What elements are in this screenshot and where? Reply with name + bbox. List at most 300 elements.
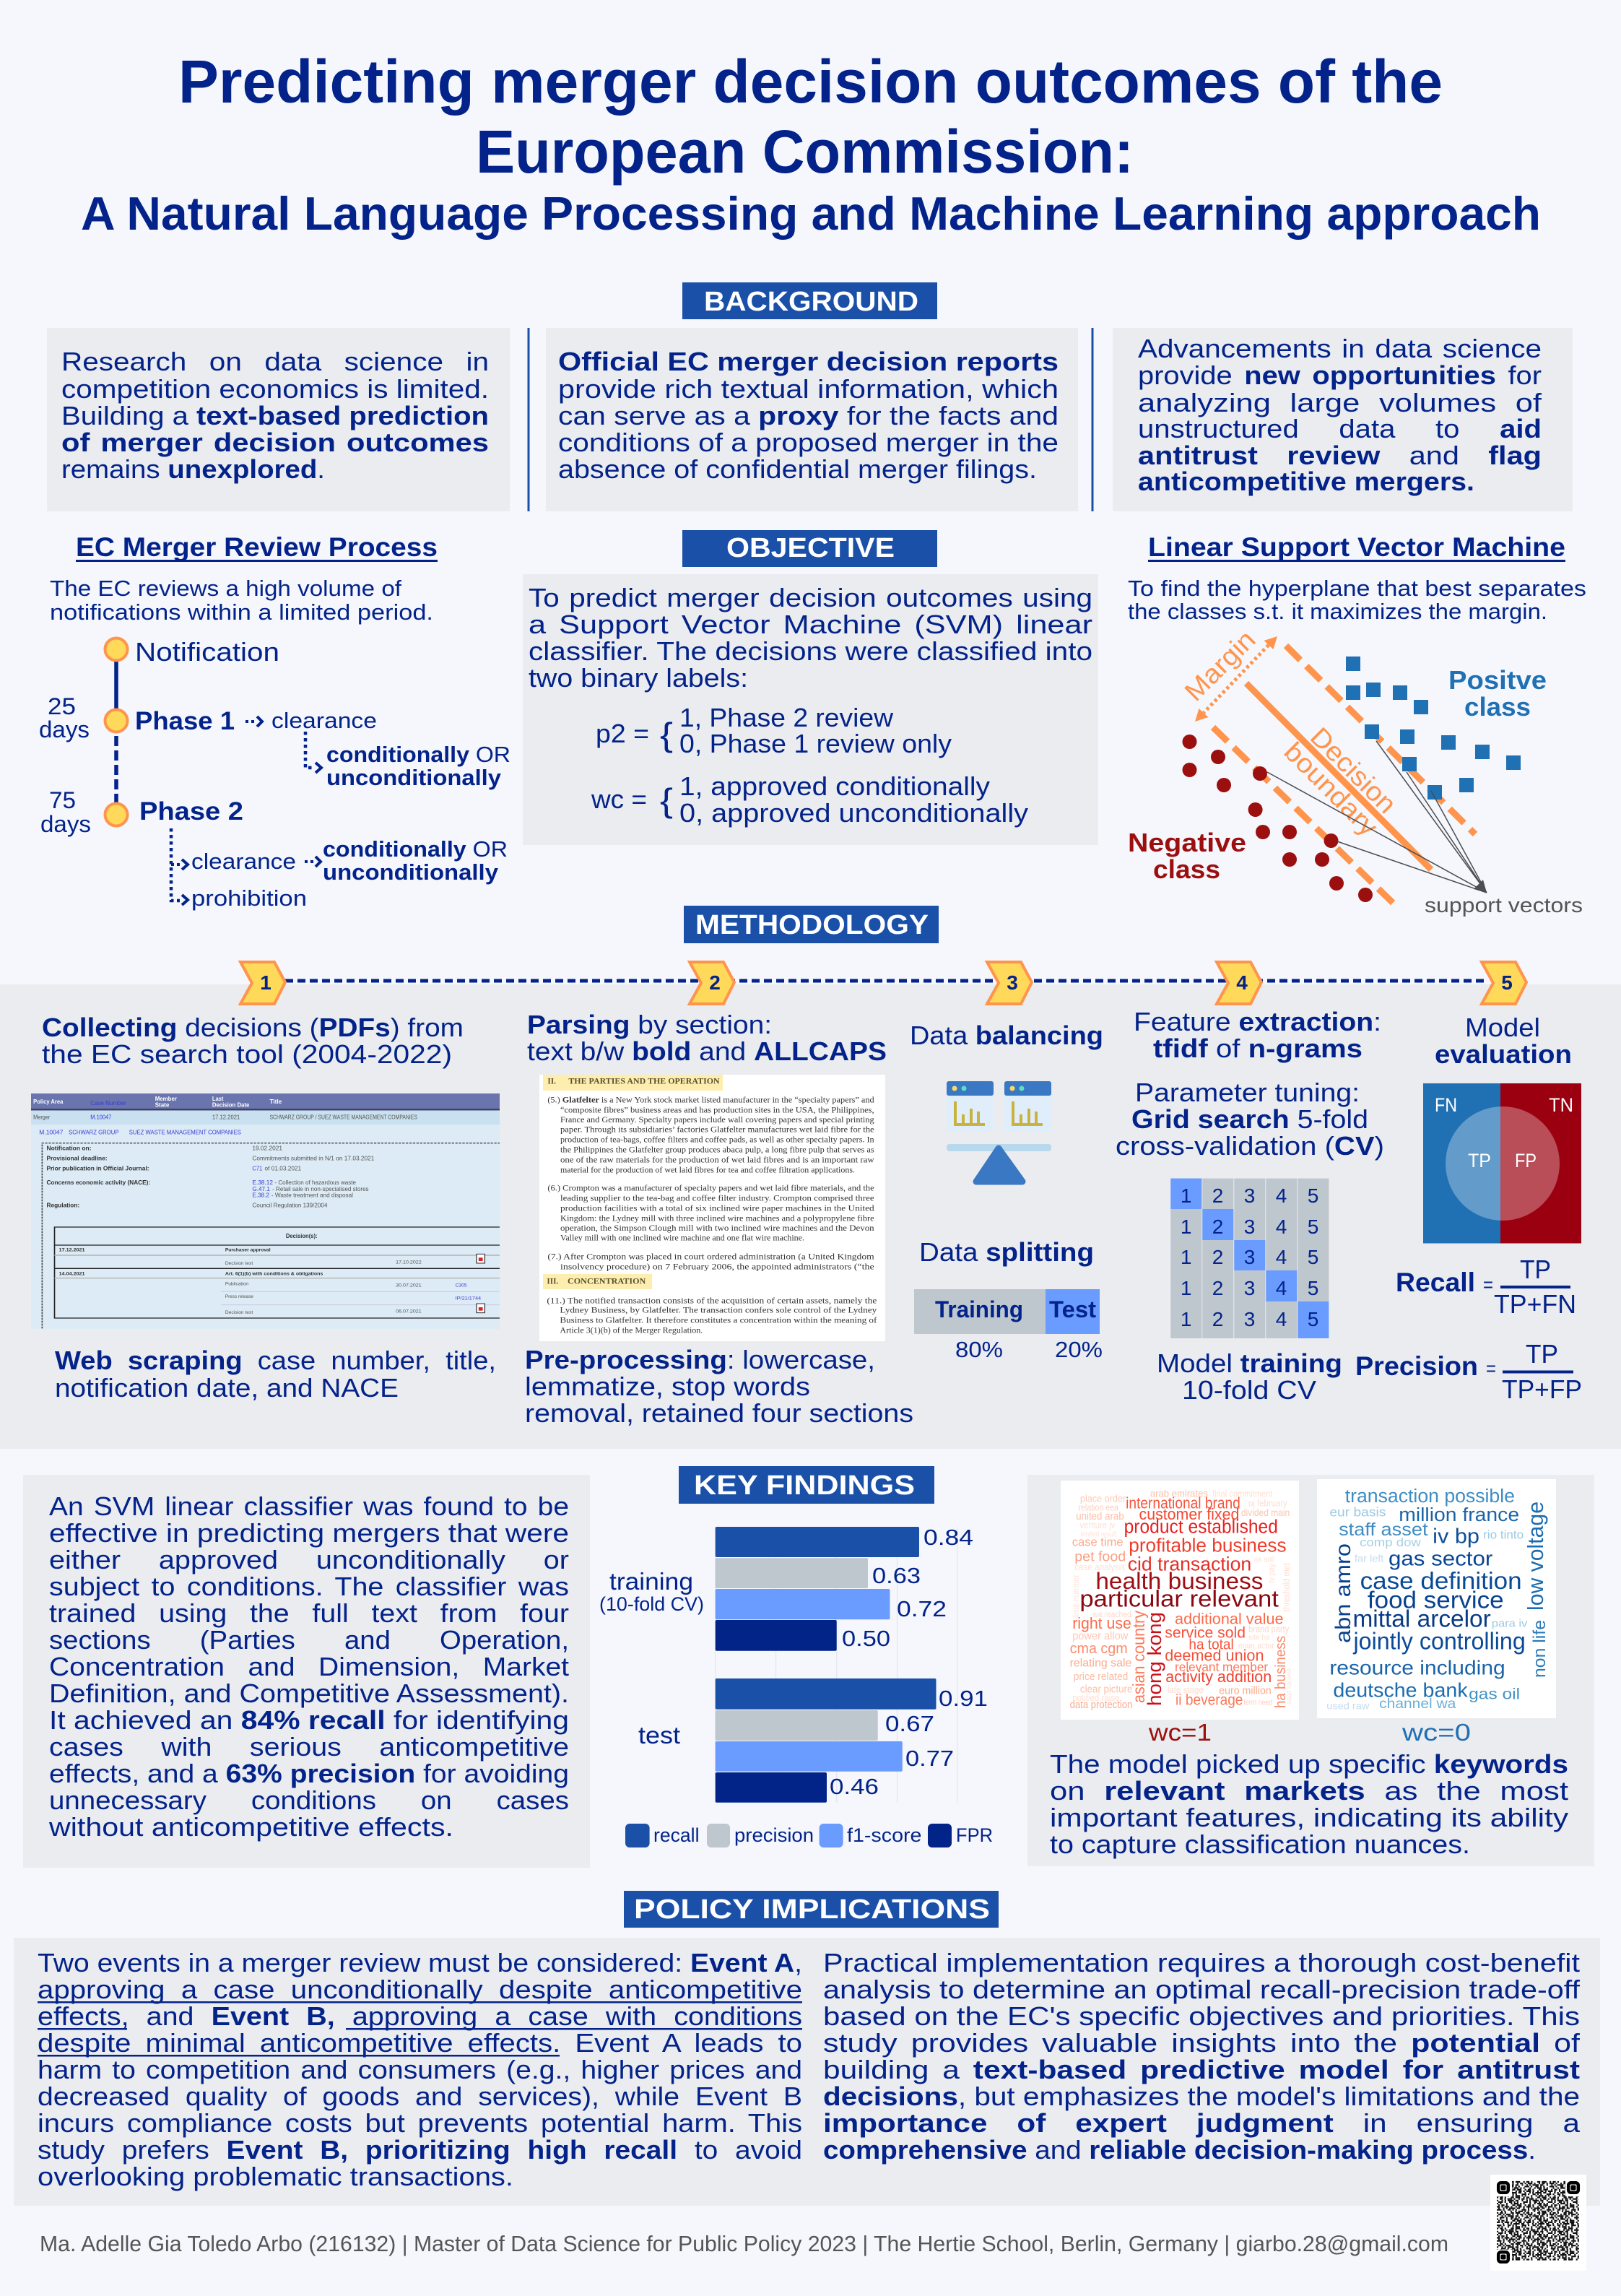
word cloud: wc=0: staff asset — [1339, 1520, 1428, 1539]
word cloud: wc=1: united arab — [1076, 1510, 1124, 1522]
panel: objective: 0, approved unconditionally — [679, 798, 1028, 828]
formula: recall: TP+FN — [1494, 1289, 1576, 1319]
text: parsing: text b/w bold and ALLCAPS — [527, 1036, 887, 1066]
word cloud: wc=0: gas sector — [1389, 1546, 1492, 1570]
timeline: merger review: clearance — [271, 708, 377, 733]
screenshot: EC case search: of 01.03.2021 — [265, 1165, 301, 1171]
chart: cross-validation grid: 4 — [1276, 1246, 1287, 1268]
screenshot: EC case search: G.47.1 — [252, 1186, 270, 1192]
text: model training: 10-fold CV — [1182, 1375, 1316, 1405]
word cloud: wc=1: oj february — [1248, 1498, 1287, 1509]
word cloud: wc=1: deemed union — [1165, 1647, 1264, 1665]
text: pre-processing: lemmatize, stop words — [525, 1372, 810, 1401]
screenshot: EC case search: Decision text — [225, 1309, 253, 1315]
text: parameter tuning: cross-validation ( CV) — [1116, 1131, 1384, 1161]
legend: f1-score — [847, 1824, 921, 1846]
screenshot: EC case search: Prior publication in Official Journal: — [46, 1165, 149, 1171]
chart: model performance bars: 0.67 — [885, 1711, 934, 1736]
word cloud: wc=0: para iv — [1492, 1617, 1528, 1629]
heading: background — [682, 282, 937, 319]
heading: key findings — [679, 1466, 934, 1504]
word cloud: wc=1: divided main — [1241, 1507, 1290, 1518]
word cloud: wc=1: activity addition — [1165, 1668, 1272, 1686]
word cloud: wc=1: euro million — [1219, 1685, 1272, 1697]
panel: key findings text: subject to conditions. The classifier was — [49, 1572, 569, 1601]
text: keywords: The model picked up specific keywords — [1050, 1749, 1568, 1779]
word cloud: wc=0: low voltage — [1523, 1502, 1548, 1611]
screenshot: EC case search: 17.12.2021 — [59, 1247, 85, 1252]
word cloud: wc=1: case time — [1072, 1535, 1124, 1548]
title: Predicting merger decision outcomes of the — [178, 48, 1443, 116]
text: EC review intro — [50, 576, 433, 625]
word cloud: wc=1: data protection — [1070, 1699, 1132, 1711]
text: policy right column: decisions , but emphasizes the model's limitations and the — [823, 2081, 1580, 2111]
chart: SVM hyperplane diagram: class — [1153, 854, 1220, 884]
chart: cross-validation grid: 1 — [1181, 1216, 1191, 1238]
heading: key findings: KEY FINDINGS — [694, 1470, 915, 1501]
chart: cross-validation grid: 5 — [1308, 1184, 1318, 1207]
legend — [625, 1824, 993, 1847]
word cloud: wc=1: pet food — [1074, 1549, 1126, 1564]
word cloud: wc=1: asian country — [1129, 1611, 1148, 1703]
text: policy left column: incurs compliance costs but prevents potential harm. This — [38, 2108, 802, 2138]
word cloud: wc=0: jointly controlling — [1352, 1628, 1526, 1655]
panel: key findings text: effects, and a 63% precision for avoiding — [49, 1759, 569, 1788]
screenshot: decision document: (5.) Glatfelter is a New York stock market listed manufacturer in the “specialty papers” and — [547, 1096, 874, 1105]
chart: cross-validation grid: 3 — [1244, 1216, 1255, 1238]
screenshot: EC case search: - Retail sale in non-specialised stores — [272, 1186, 369, 1192]
screenshot: EC case search: Last — [212, 1096, 223, 1102]
word cloud: wc=1: service sold — [1165, 1624, 1246, 1641]
title — [81, 48, 1541, 240]
panel: key findings text — [23, 1475, 590, 1868]
word cloud: wc=1: product established — [1124, 1517, 1278, 1538]
screenshot: decision document: II. — [547, 1078, 556, 1086]
screenshot: EC case search: Notification on: — [46, 1145, 92, 1151]
chart: cross-validation grid: 4 — [1276, 1277, 1287, 1299]
panel: research gap: remains unexplored . — [61, 454, 325, 484]
timeline: methodology steps: 5 — [1501, 971, 1513, 994]
screenshot: EC case search: SUEZ WASTE MANAGEMENT COMPANIES — [129, 1129, 241, 1135]
panel: objective — [523, 574, 1098, 845]
formula: recall: = — [1483, 1273, 1493, 1296]
chart: model performance bars: 0.84 — [924, 1525, 973, 1550]
chart: cross-validation grid: 5 — [1308, 1216, 1318, 1238]
screenshot: EC case search: 17.12.2021 — [212, 1114, 240, 1120]
timeline: merger review — [39, 637, 510, 911]
chart: cross-validation grid: 2 — [1212, 1246, 1223, 1268]
word cloud: wc=1: tv pay — [1266, 1564, 1277, 1583]
panel: opportunities: unstructured data to aid — [1138, 414, 1542, 443]
chart: SVM hyperplane diagram: Positve — [1448, 665, 1547, 695]
timeline: merger review: Notification — [135, 637, 279, 667]
screenshot: EC case search: SCHWARZ GROUP — [69, 1129, 118, 1135]
panel: official reports — [546, 328, 1078, 511]
text: data splitting: Data splitting — [919, 1237, 1094, 1267]
word cloud: wc=1: limit number — [1071, 1574, 1081, 1618]
chart: model performance bars: 0.46 — [830, 1774, 879, 1799]
panel: key findings text: cases with serious anticompetitive — [49, 1732, 569, 1762]
word cloud: wc=1: na anti — [1254, 1555, 1274, 1564]
word cloud: wc=1: customer fixed — [1139, 1506, 1239, 1523]
panel: opportunities: antitrust review and flag — [1138, 441, 1542, 470]
formula: precision: = — [1486, 1357, 1496, 1379]
chart: confusion matrix diagram: TP — [1468, 1150, 1491, 1171]
chart: confusion matrix diagram: TN — [1549, 1094, 1573, 1116]
screenshot: decision document: Kingdom: the Lydney mill with three inclined wire machines and a polypropylene fibre — [560, 1214, 874, 1223]
chart: model performance bars: 0.91 — [939, 1686, 988, 1711]
chart: model performance bars: 0.77 — [905, 1746, 954, 1771]
chart: cross-validation grid: 3 — [1244, 1184, 1255, 1207]
text: model evaluation: evaluation — [1435, 1039, 1572, 1069]
screenshot: decision document: France and Germany. Specialty papers include wall covering papers and special printing — [560, 1116, 874, 1125]
word cloud: wc=0: iv bp — [1433, 1524, 1479, 1548]
heading: EC merger review process: EC Merger Review Process — [76, 532, 438, 562]
heading: objective — [682, 530, 937, 567]
screenshot: decision document: “composite fibres” business areas and has production sites in the USA, the Philippines, — [560, 1106, 874, 1115]
screenshot: EC case search: Publication — [225, 1281, 248, 1286]
screenshot: EC case search: 14.04.2021 — [59, 1270, 85, 1276]
word cloud: wc=0: non life — [1530, 1620, 1550, 1678]
text: policy right column: study provides valuable insights into the potential of — [823, 2028, 1581, 2058]
panel: objective: 0, Phase 1 review only — [679, 729, 952, 758]
screenshot: EC case search: Provisional deadline: — [46, 1156, 108, 1161]
screenshot: decision document: (6.) Crompton was a manufacturer of specialty papers and wet laid fibre materials, and the — [547, 1184, 874, 1192]
chart: cross-validation grid: 5 — [1308, 1308, 1318, 1330]
screenshot: decision document: THE PARTIES AND THE OPERATION — [568, 1078, 721, 1086]
screenshot: EC case search: State — [155, 1101, 169, 1108]
word cloud: wc=0 — [1317, 1479, 1556, 1718]
text: model evaluation — [1435, 1013, 1572, 1069]
text: model training: Model training — [1157, 1348, 1342, 1378]
panel: objective: wc = — [591, 784, 647, 814]
panel: objective: two binary labels: — [529, 663, 748, 693]
panel: keywords — [1027, 1475, 1594, 1866]
screenshot: decision document: production of tea-bags, coffee filters and coffee pads, as well as other specialty papers. In — [560, 1135, 874, 1144]
panel: objective: 1, Phase 2 review — [679, 703, 894, 732]
panel: key findings text: trained using the full text from four — [49, 1598, 569, 1628]
word cloud: wc=0: gas oil — [1469, 1685, 1520, 1702]
chart: confusion matrix diagram: FN — [1435, 1094, 1457, 1116]
text: policy left column: approving a case unconditionally despite anticompetitive — [38, 1975, 802, 2004]
panel: research gap: competition economics is limited. — [61, 374, 489, 404]
chart: cross-validation grid: 1 — [1181, 1184, 1191, 1207]
screenshot: decision document: leading supplier to the tea-bag and coffee filter industry. Crompton comprised three — [560, 1194, 874, 1203]
text: keywords — [1050, 1749, 1568, 1859]
timeline: merger review: 25 — [48, 693, 76, 719]
panel: research gap: Research on data science in — [61, 347, 489, 376]
text: parameter tuning: Grid search 5-fold — [1131, 1104, 1368, 1134]
formula: precision: TP+FP — [1502, 1374, 1582, 1404]
screenshot: decision document: material for the production of wet laid fibres for tea and coffee filtration applications. — [560, 1166, 855, 1174]
panel: opportunities: anticompetitive mergers. — [1138, 467, 1474, 496]
panel: official reports: provide rich textual information, which — [558, 374, 1059, 404]
text: model training — [1157, 1348, 1342, 1405]
panel: objective: To predict merger decision outcomes using — [529, 583, 1092, 612]
chart: train test split: Test — [1049, 1296, 1096, 1322]
label: wc=1: wc=1 — [1148, 1719, 1212, 1746]
chart: model performance bars: training — [609, 1568, 693, 1595]
chart: train test split: 20% — [1055, 1337, 1103, 1362]
timeline: merger review: 75 — [49, 787, 76, 813]
timeline: merger review: unconditionally — [323, 859, 499, 885]
screenshot: EC case search: Purchaser approval — [225, 1247, 271, 1252]
word cloud: wc=1: ha total — [1188, 1637, 1234, 1652]
text: parameter tuning: Parameter tuning: — [1135, 1078, 1360, 1107]
word cloud: wc=1: threshold met — [1281, 1563, 1292, 1611]
screenshot: EC case search: Case Number — [90, 1100, 126, 1106]
text: SVM intro — [1128, 576, 1586, 624]
text: SVM intro: the classes s.t. it maximizes the margin. — [1128, 599, 1547, 624]
heading: background: BACKGROUND — [704, 287, 918, 317]
word cloud: wc=1 — [1061, 1481, 1299, 1720]
word cloud: wc=1: term need — [1243, 1698, 1272, 1707]
screenshot: EC case search: 19.02.2021 — [252, 1145, 282, 1151]
screenshot: decision document: Valley mill with one inclined wire machine and one flat wire machine. — [560, 1234, 804, 1242]
text: policy left column: harm to competition and consumers (e.g., higher prices and — [38, 2055, 802, 2084]
timeline: methodology steps: 2 — [709, 971, 721, 994]
chart: cross-validation grid — [1170, 1179, 1329, 1338]
text: SVM intro: To find the hyperplane that best separates — [1128, 576, 1586, 601]
legend: precision — [734, 1824, 814, 1846]
text: pre-processing — [525, 1345, 913, 1428]
text: parsing — [527, 1010, 887, 1066]
panel: key findings text: It achieved an 84% recall for identifying — [49, 1705, 569, 1735]
panel: opportunities — [1113, 328, 1573, 511]
word cloud: wc=1: relating sale — [1070, 1657, 1131, 1670]
heading: methodology — [684, 906, 939, 943]
word cloud: wc=1: aand receive — [1285, 1668, 1292, 1704]
text: web scraping: notification date, and NACE — [55, 1373, 399, 1403]
timeline: methodology steps: 4 — [1236, 971, 1248, 994]
screenshot: decision document: Business to Glatfelter. It therefore constitutes a concentration within the meaning of — [560, 1317, 877, 1325]
screenshot: EC case search: Concerns economic activity (NACE): — [46, 1179, 150, 1186]
timeline: methodology steps — [240, 962, 1526, 1004]
panel: objective: { — [660, 781, 673, 819]
screenshot: decision document: operation, the Simpson Clough mill with two inclined wire machines and the Devon — [560, 1224, 874, 1233]
text: policy right column: Practical implementation requires a thorough cost-benefit — [823, 1948, 1580, 1977]
screenshot: EC case search: Regulation: — [46, 1203, 79, 1208]
text: policy left column — [38, 1948, 802, 2191]
panel: policy implications — [14, 1938, 1600, 2206]
word cloud: wc=0: channel wa — [1379, 1697, 1456, 1712]
text: policy right column: comprehensive and reliable decision-making process . — [823, 2135, 1536, 2165]
chart: model performance bars — [599, 1525, 993, 1847]
screenshot: EC case search: Decision(s): — [286, 1233, 318, 1239]
text: policy right column: importance of expert judgment in ensuring a — [823, 2108, 1581, 2138]
text: keywords: on relevant markets as the most — [1050, 1776, 1568, 1806]
chart: cross-validation grid: 5 — [1308, 1277, 1318, 1299]
text: parsing: Parsing by section: — [527, 1010, 772, 1039]
panel: research gap: of merger decision outcomes — [61, 428, 489, 457]
word cloud: wc=0: deutsche bank — [1333, 1678, 1468, 1702]
formula: recall: Recall — [1396, 1268, 1475, 1297]
chart: cross-validation grid: 2 — [1212, 1277, 1223, 1299]
text: collecting: Collecting decisions ( PDFs) from — [42, 1013, 464, 1042]
chart: confusion matrix diagram — [1423, 1083, 1581, 1244]
screenshot: decision document: paper. Through its subsidiaries’ factories Glatfelter manufactures wet laid fibre for the — [560, 1125, 874, 1134]
screenshot: EC case search: Decision text — [225, 1260, 253, 1266]
screenshot: EC case search: Member — [155, 1096, 177, 1102]
timeline: merger review: conditionally OR — [326, 742, 510, 767]
word cloud: wc=0: used raw — [1326, 1700, 1370, 1712]
chart: SVM hyperplane diagram: Negative — [1128, 828, 1246, 857]
screenshot: EC case search: Decision Date — [212, 1101, 249, 1108]
panel: key findings text: An SVM linear classifier was found to be — [49, 1491, 569, 1521]
word cloud: wc=1: particular relevant — [1079, 1586, 1279, 1611]
word cloud: wc=0: million france — [1399, 1505, 1519, 1525]
chart: cross-validation grid: 3 — [1244, 1277, 1255, 1299]
legend: FPR — [956, 1824, 993, 1846]
screenshot: EC case search: 06.07.2021 — [396, 1308, 422, 1314]
screenshot: EC case search: Council Regulation 139/2004 — [252, 1203, 327, 1208]
word cloud: wc=0: mittal arcelor — [1352, 1606, 1491, 1632]
word cloud: wc=1: hong kong — [1144, 1612, 1165, 1706]
text: policy left column: study prefers Event B, prioritizing high recall to avoid — [38, 2135, 802, 2165]
timeline: merger review: days — [40, 811, 91, 837]
text: collecting: the EC search tool (2004-2022) — [42, 1039, 452, 1069]
icon: QR code — [1490, 2175, 1586, 2271]
screenshot: decision document: CONCENTRATION — [568, 1278, 646, 1286]
word cloud: wc=1: arab emirates — [1150, 1488, 1208, 1499]
word cloud: wc=1: venture jv — [1079, 1520, 1116, 1530]
screenshot: EC case search — [31, 1093, 503, 1331]
screenshot: decision document: (11.) The notified transaction consists of the acquisition of certain assets, namely the — [547, 1296, 877, 1305]
panel: objective: { — [660, 716, 673, 753]
text: EC review intro: The EC reviews a high volume of — [50, 576, 401, 601]
heading: methodology: METHODOLOGY — [695, 910, 929, 940]
chart: SVM hyperplane diagram: support vectors — [1425, 894, 1583, 917]
screenshot: EC case search: Press release — [225, 1294, 253, 1299]
legend: recall — [653, 1824, 699, 1846]
screenshot: EC case search: C305 — [456, 1282, 467, 1288]
chart: SVM hyperplane diagram: Decision — [1305, 722, 1402, 819]
word cloud: wc=1: clear picture — [1080, 1684, 1132, 1696]
timeline: methodology steps: 1 — [260, 971, 271, 994]
title: European Commission: — [476, 118, 1134, 186]
heading: policy implications: POLICY IMPLICATIONS — [634, 1894, 990, 1925]
text: pre-processing: removal, retained four sections — [525, 1398, 913, 1428]
word cloud: wc=1: final commitment — [1212, 1489, 1272, 1499]
word cloud: wc=0: case definition — [1360, 1568, 1522, 1595]
chart: model performance bars: 0.50 — [842, 1626, 890, 1651]
chart: model performance bars: 0.72 — [897, 1596, 947, 1621]
chart: cross-validation grid: 3 — [1244, 1308, 1255, 1330]
word cloud: wc=1: price related — [1074, 1671, 1128, 1683]
chart: cross-validation grid: 1 — [1181, 1308, 1191, 1330]
screenshot: EC case search: M.10047 — [39, 1129, 63, 1135]
panel: research gap: Building a text-based prediction — [61, 401, 489, 430]
word cloud: wc=1: additional value — [1175, 1610, 1284, 1627]
chart: cross-validation grid: 1 — [1181, 1277, 1191, 1299]
text: web scraping — [55, 1346, 496, 1403]
screenshot: EC case search: M.10047 — [90, 1114, 111, 1120]
chart: model performance bars: (10-fold CV) — [599, 1593, 704, 1615]
word cloud: wc=0: abn amro — [1331, 1543, 1355, 1643]
chart: cross-validation grid: 5 — [1308, 1246, 1318, 1268]
word cloud: wc=1: site ha — [1248, 1633, 1270, 1642]
text: policy right column: building a text-based predictive model for antitrust — [823, 2055, 1580, 2084]
chart: SVM hyperplane diagram: boundary — [1279, 737, 1384, 842]
word cloud: wc=1: brand party — [1248, 1624, 1290, 1634]
heading: linear SVM: Linear Support Vector Machine — [1148, 532, 1565, 562]
chart: cross-validation grid: 2 — [1212, 1184, 1223, 1207]
word cloud: wc=1: profitable business — [1129, 1535, 1287, 1556]
word cloud: wc=1: relevant member — [1175, 1660, 1268, 1674]
panel: opportunities: Advancements in data science — [1138, 334, 1542, 363]
timeline: merger review: conditionally OR — [323, 836, 508, 862]
chart: model performance bars: 0.63 — [872, 1563, 921, 1588]
text: web scraping: Web scraping case number, title, — [55, 1346, 496, 1375]
screenshot: EC case search: - Collection of hazardous waste — [274, 1179, 356, 1186]
timeline: merger review: days — [39, 716, 90, 742]
timeline: merger review: clearance — [191, 849, 296, 874]
word cloud: wc=1: case analysis — [1074, 1561, 1125, 1572]
chart: cross-validation grid: 2 — [1212, 1216, 1223, 1238]
word cloud: wc=1: health business — [1095, 1568, 1263, 1594]
chart: cross-validation grid: 4 — [1276, 1184, 1287, 1207]
heading: objective: OBJECTIVE — [726, 533, 895, 563]
screenshot: EC case search: 17.10.2022 — [396, 1259, 422, 1265]
word cloud: wc=1: late stage — [1168, 1684, 1204, 1695]
panel: official reports: Official EC merger decision reports — [558, 347, 1059, 376]
panel: opportunities: provide new opportunities for — [1138, 360, 1542, 390]
screenshot: EC case search: Commitments submitted in N/1 on 17.03.2021 — [252, 1156, 374, 1161]
screenshot: decision document — [539, 1075, 885, 1341]
screenshot: EC case search: SCHWARZ GROUP / SUEZ WASTE MANAGEMENT COMPANIES — [269, 1114, 417, 1120]
text: feature extraction: Feature extraction : — [1134, 1007, 1381, 1036]
chart: cross-validation grid: 4 — [1276, 1308, 1287, 1330]
text: feature extraction — [1134, 1007, 1381, 1063]
chart: train test split — [914, 1289, 1103, 1362]
screenshot: EC case search: E.38.12 — [252, 1179, 273, 1186]
panel: opportunities: analyzing large volumes of — [1138, 388, 1542, 417]
chart: SVM hyperplane diagram: Margin — [1179, 625, 1261, 707]
screenshot: EC case search: Title — [269, 1099, 282, 1105]
screenshot: EC case search: C71 — [252, 1165, 262, 1171]
word cloud: wc=1: international brand — [1126, 1494, 1240, 1512]
screenshot: EC case search: Art. 6(1)(b) with conditions & obligations — [225, 1270, 323, 1276]
text: feature extraction: tfidf of n-grams — [1153, 1034, 1363, 1063]
chart: train test split: Training — [935, 1296, 1023, 1322]
title: A Natural Language Processing and Machine Learning approach — [81, 187, 1541, 240]
chart: confusion matrix diagram: FP — [1515, 1150, 1537, 1171]
screenshot: EC case search: Merger — [33, 1114, 50, 1120]
text: policy left column: Two events in a merger review must be considered: Event A , — [38, 1948, 802, 1977]
word cloud: wc=0: transaction possible — [1345, 1486, 1515, 1507]
word cloud: wc=1: wa reached — [1092, 1610, 1131, 1619]
chart: cross-validation grid: 4 — [1276, 1216, 1287, 1238]
word cloud: wc=0: far left — [1355, 1553, 1383, 1564]
panel: objective: a Support Vector Machine (SVM) linear — [529, 610, 1092, 639]
label: wc=0: wc=0 — [1401, 1719, 1471, 1746]
chart: cross-validation grid: 1 — [1181, 1246, 1191, 1268]
word cloud: wc=1: cma cgm — [1070, 1641, 1128, 1657]
timeline: merger review: prohibition — [191, 885, 307, 911]
icon: balance scale — [947, 1081, 1051, 1182]
text: policy left column: despite minimal anticompetitive effects. Event A leads to — [38, 2028, 802, 2058]
chart: model performance bars: test — [638, 1722, 680, 1749]
panel: official reports: absence of confidential merger filings. — [558, 454, 1037, 484]
text: keywords: to capture classification nuances. — [1050, 1829, 1470, 1859]
word cloud: wc=1: cid transaction — [1128, 1553, 1251, 1575]
text: policy left column: overlooking problematic transactions. — [38, 2162, 513, 2191]
screenshot: decision document: III. — [547, 1278, 558, 1286]
text: policy right column — [823, 1948, 1581, 2165]
screenshot: decision document: Lydney Business, by Glatfelter. The transaction confers sole control of the Lydney — [560, 1306, 877, 1314]
chart: SVM hyperplane diagram: class — [1464, 692, 1531, 722]
formula: precision: Precision — [1355, 1351, 1478, 1381]
